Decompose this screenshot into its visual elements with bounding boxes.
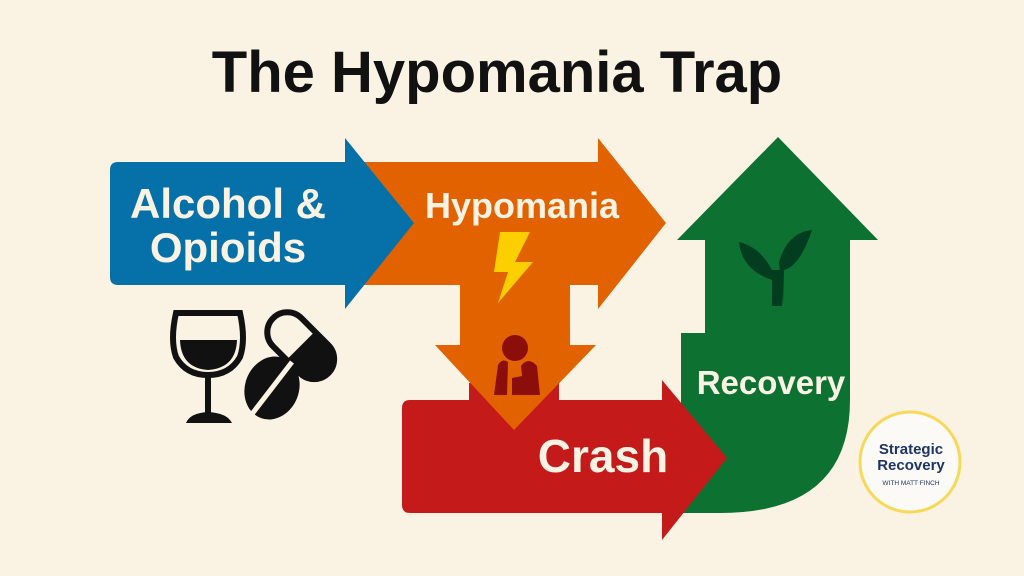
icon: wine glass <box>173 313 243 423</box>
icon: sprout <box>739 230 812 306</box>
title: The Hypomania Trap <box>212 40 782 105</box>
icon: slumped person <box>494 335 540 395</box>
arrow: crash <box>402 380 727 540</box>
logo: Strategic <box>879 441 943 458</box>
label: hypomania: Hypomania <box>425 185 620 226</box>
arrow: alcohol & opioids: Opioids <box>150 224 306 271</box>
arrow: alcohol & opioids <box>110 138 414 309</box>
logo: WITH MATT FINCH <box>882 480 940 487</box>
arrow: recovery <box>677 137 878 513</box>
icon: pills <box>236 304 342 427</box>
label: crash: Crash <box>538 430 668 482</box>
label: alcohol & opioids: Alcohol & <box>130 180 326 227</box>
arrow: hypomania <box>355 138 666 430</box>
icon: lightning <box>494 232 533 303</box>
label: recovery: Recovery <box>697 364 846 401</box>
logo: Recovery <box>877 457 945 474</box>
logo <box>860 412 960 512</box>
